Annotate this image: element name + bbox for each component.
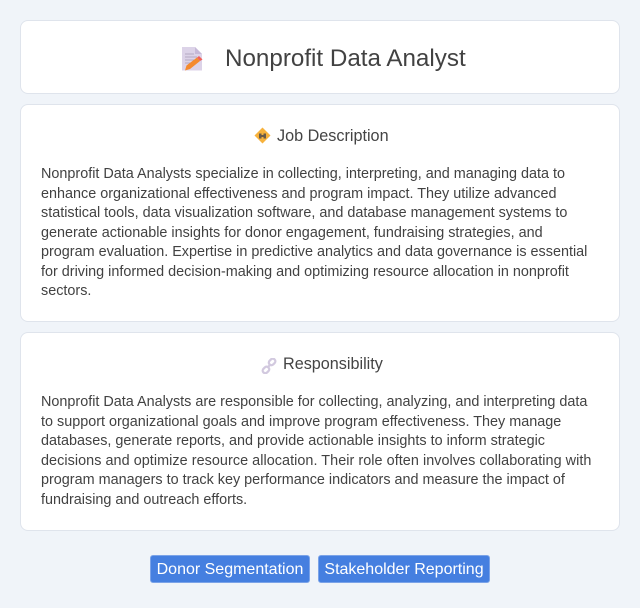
text block: responsibility: Nonprofit Data Analysts are responsible for collecting, analyzing, and interpreting data: [41, 394, 587, 410]
heading: responsibility: Responsibility: [283, 355, 383, 373]
text block: job description: generate actionable insights for donor engagement, fundraising strategies, and: [41, 225, 543, 241]
text block: job description: sectors.: [41, 283, 91, 299]
text block: responsibility: databases, generate reports, and provide actionable insights to inform strategic: [41, 433, 545, 449]
text block: job description: enhance organizational effectiveness and program impact. They utilize advanced: [41, 186, 556, 202]
panel: title card: [20, 20, 620, 94]
panel: responsibility: [20, 332, 620, 531]
tag: donor segmentation: Donor Segmentation: [157, 561, 303, 578]
text block: job description: Nonprofit Data Analysts specialize in collecting, interpreting, and managing data to: [41, 166, 565, 182]
text block: responsibility: decisions and optimize resource allocation. Their role often involves collaborating with: [41, 453, 591, 469]
text block: job description: [41, 166, 587, 299]
tag: stakeholder reporting: [318, 555, 490, 583]
text block: job description: statistical tools, data visualization software, and database management systems to: [41, 205, 567, 221]
icon: document with pencil: [182, 47, 202, 70]
text block: job description: for driving informed decision-making and optimizing resource allocation in nonprofit: [41, 264, 569, 280]
tag: donor segmentation: [150, 555, 310, 583]
tag: stakeholder reporting: Stakeholder Reporting: [324, 561, 484, 578]
text block: responsibility: program managers to track key performance indicators and measure the impact of: [41, 472, 565, 488]
text block: responsibility: to support organizational goals and improve program effectiveness. They manage: [41, 414, 561, 430]
text block: job description: program evaluation. Expertise in predictive analytics and data governance is essential: [41, 244, 587, 260]
text block: responsibility: fundraising and outreach efforts.: [41, 492, 247, 508]
text block: responsibility: [41, 394, 591, 508]
icon: diamond sign: [254, 128, 270, 144]
panel: job description: [20, 104, 620, 322]
icon: chain link: [262, 358, 276, 374]
title: Nonprofit Data Analyst: [225, 45, 466, 72]
heading: job description: Job Description: [277, 127, 389, 145]
